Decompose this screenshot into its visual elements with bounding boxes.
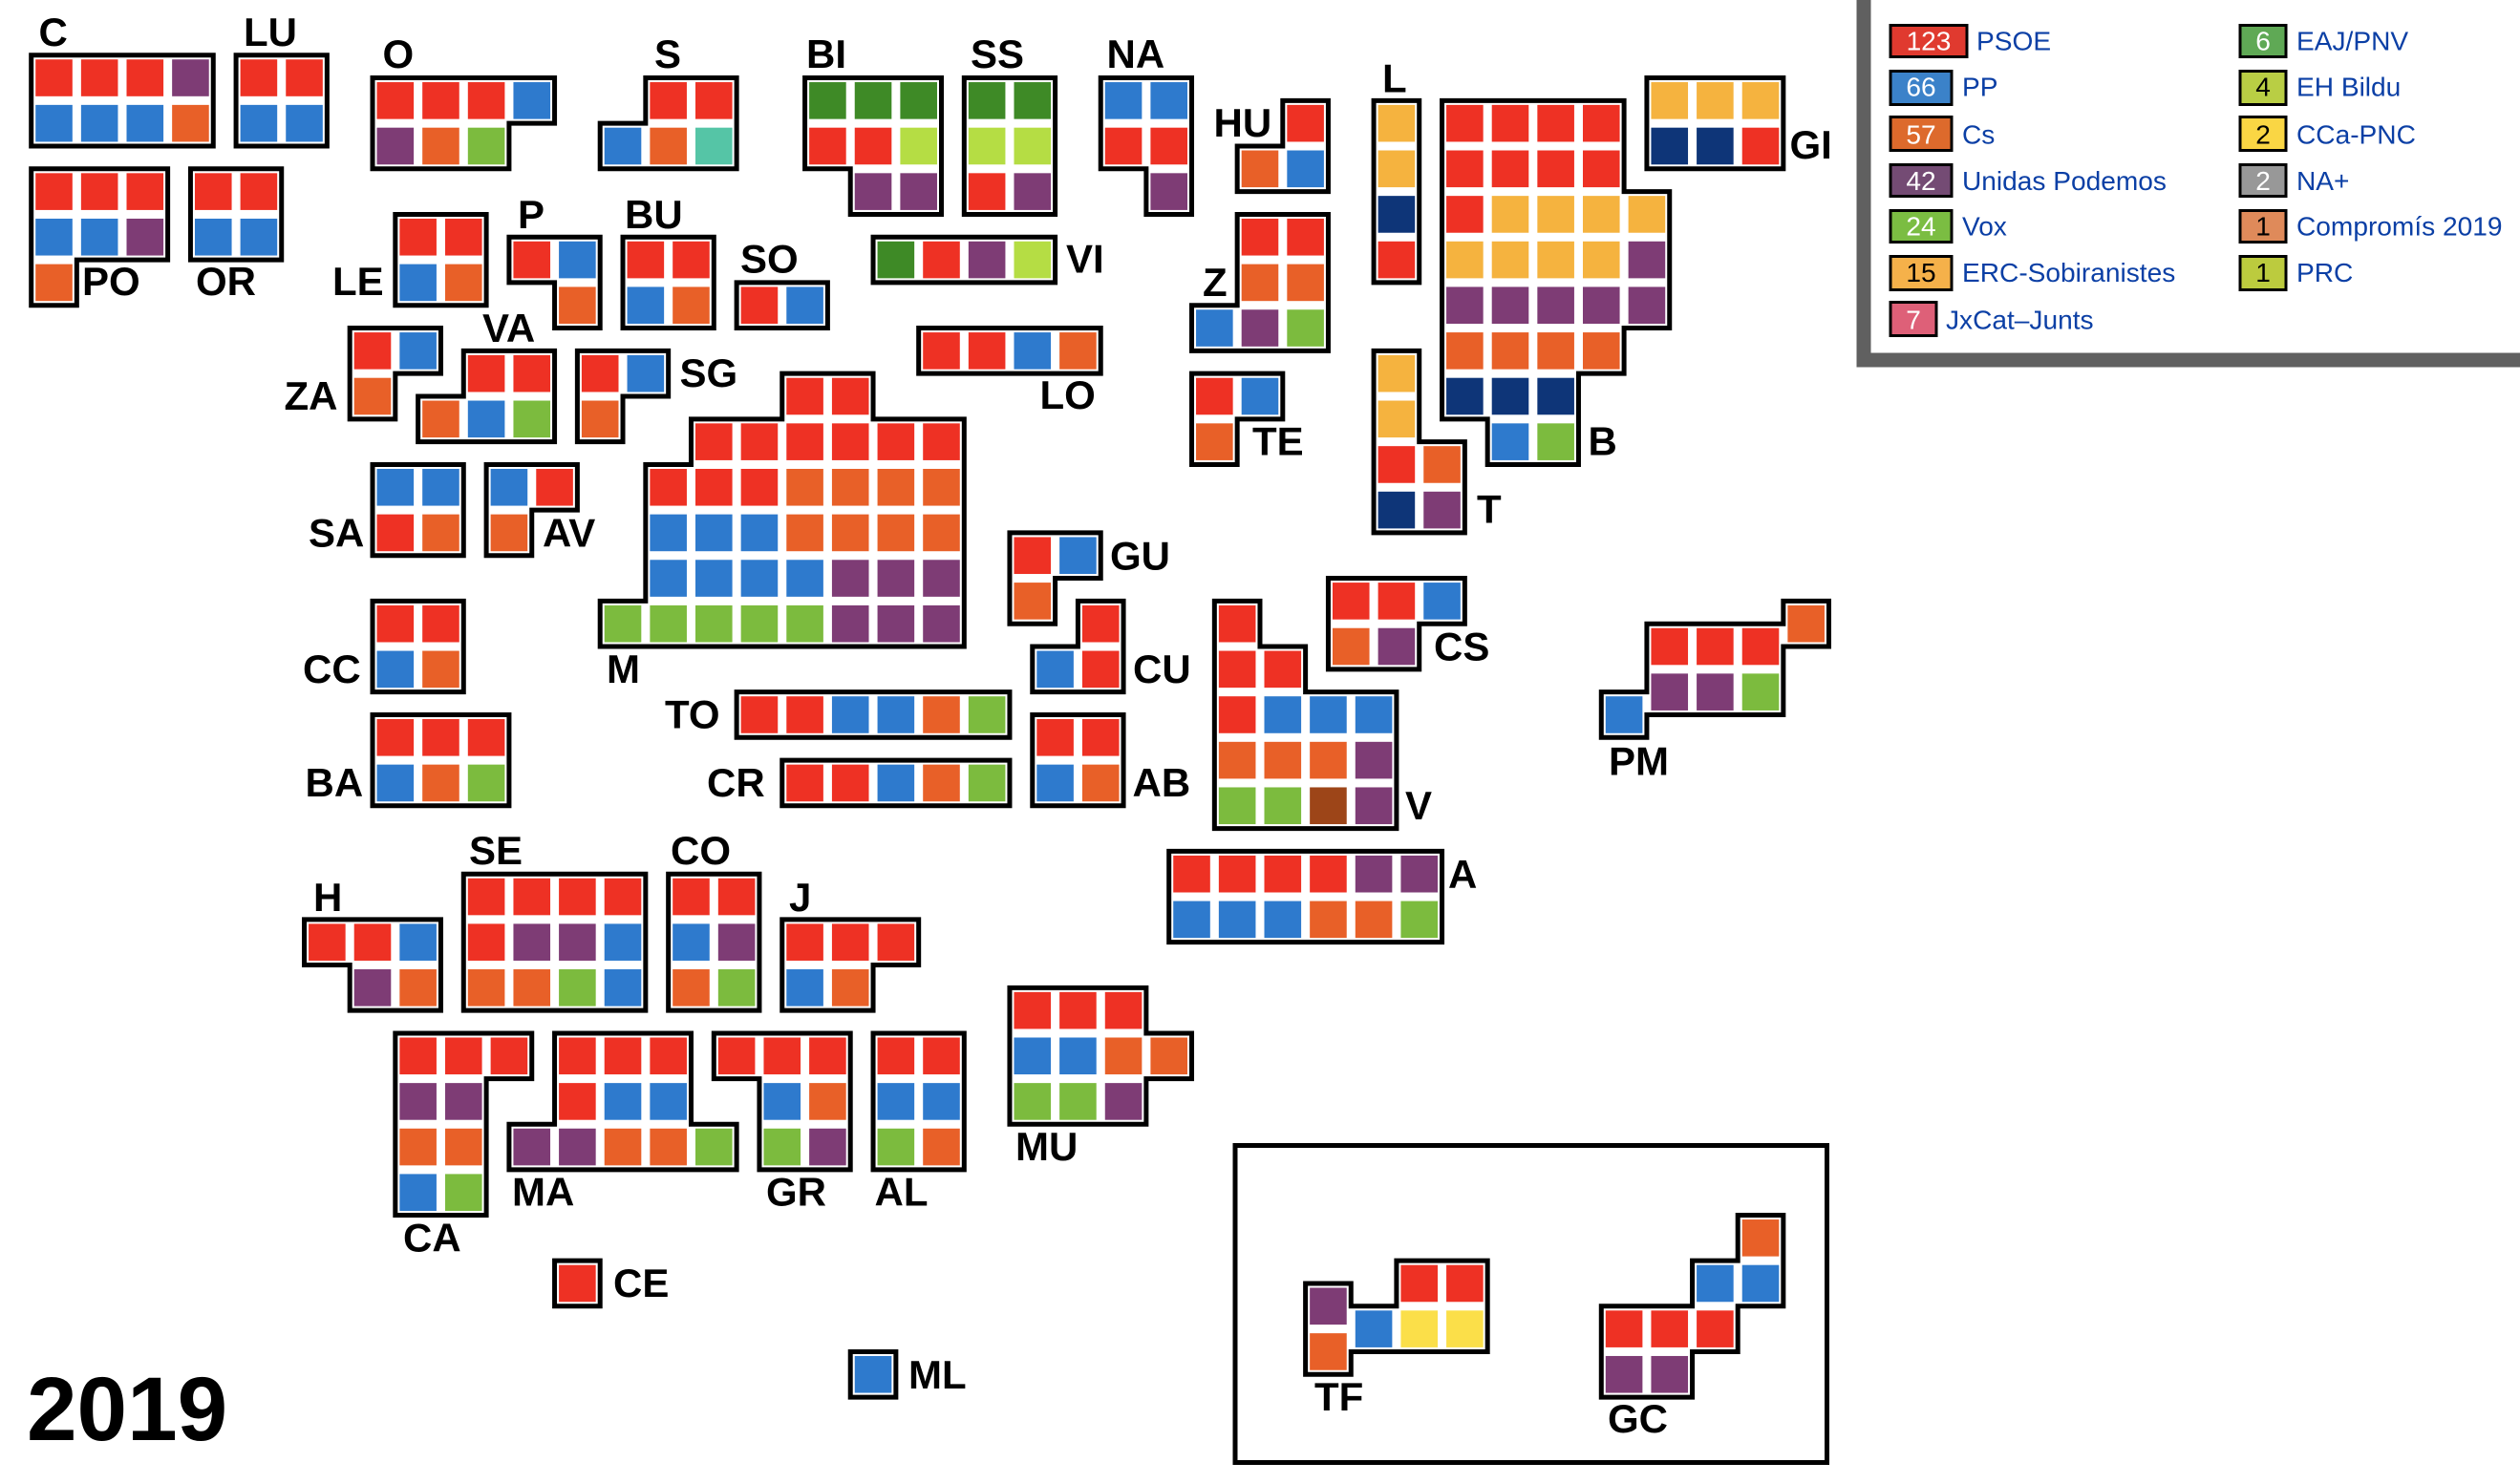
label: H: H xyxy=(313,875,342,920)
block: L xyxy=(1374,100,1420,283)
legend item: PSOE xyxy=(1890,25,2051,57)
block: LE xyxy=(395,214,486,306)
label: AB: AB xyxy=(1133,760,1190,805)
block: T xyxy=(1374,350,1464,533)
label: M: M xyxy=(607,647,640,691)
block: AL xyxy=(873,1033,964,1170)
label: SO: SO xyxy=(740,237,799,281)
block: GU xyxy=(1010,533,1100,624)
block: CO xyxy=(669,874,759,1010)
block: Z xyxy=(1192,214,1328,350)
label: B: B xyxy=(1588,418,1617,464)
block: SE xyxy=(463,874,646,1010)
block: PO xyxy=(32,169,168,306)
block: HU xyxy=(1237,100,1328,192)
legend item: EH Bildu xyxy=(2240,71,2401,105)
label: GI: GI xyxy=(1790,122,1832,167)
block: CA xyxy=(395,1033,532,1216)
legend item: PP: PP xyxy=(1962,73,1997,101)
legend item: Compromís 2019: 1 xyxy=(2255,212,2271,241)
legend item: NA+: 2 xyxy=(2255,166,2271,196)
legend item: Compromís 2019: Compromís 2019 xyxy=(2296,212,2502,241)
legend item: Vox xyxy=(1890,210,2007,243)
label: TF: TF xyxy=(1314,1374,1363,1419)
province blocks xyxy=(32,55,1828,1397)
block: CE xyxy=(555,1261,600,1306)
label: SS: SS xyxy=(971,32,1024,76)
block: TE xyxy=(1192,373,1283,464)
block: SS xyxy=(964,78,1056,214)
legend item: Vox: Vox xyxy=(1962,212,2007,241)
block: SG xyxy=(577,350,669,442)
label: CO: CO xyxy=(671,828,731,873)
legend item: Cs xyxy=(1890,117,1995,151)
label: BI: BI xyxy=(806,32,846,76)
legend item: EAJ/PNV: EAJ/PNV xyxy=(2296,27,2408,55)
block: VA xyxy=(418,350,555,442)
label: LU: LU xyxy=(244,10,297,54)
block: H xyxy=(305,920,440,1010)
legend item: JxCat-Junts xyxy=(1890,302,2094,336)
label: MU: MU xyxy=(1015,1124,1078,1169)
label: BA: BA xyxy=(306,760,363,805)
label: PM: PM xyxy=(1609,739,1669,783)
legend item: EAJ/PNV xyxy=(2240,25,2408,57)
block: GI xyxy=(1647,78,1783,169)
legend item: PSOE: PSOE xyxy=(1976,27,2051,55)
label: P: P xyxy=(518,192,545,237)
legend item: Unidas Podemos: Unidas Podemos xyxy=(1962,166,2167,196)
label: V: V xyxy=(1405,783,1432,828)
legend item: Cs: Cs xyxy=(1962,120,1995,149)
label: J: J xyxy=(789,875,811,920)
label: HU: HU xyxy=(1213,100,1271,145)
block: C xyxy=(32,55,213,146)
block: CC xyxy=(373,601,463,692)
legend item: EH Bildu: 4 xyxy=(2255,73,2271,101)
block: MU xyxy=(1010,987,1192,1124)
label: CE: CE xyxy=(613,1261,669,1305)
label: CC: CC xyxy=(303,647,361,691)
block: BU xyxy=(623,237,714,329)
block: SO xyxy=(737,283,827,329)
block: AB xyxy=(1033,714,1123,806)
block: AV xyxy=(486,464,577,556)
label: CR: CR xyxy=(707,760,765,805)
block: MA xyxy=(509,1033,737,1170)
block: BI xyxy=(805,78,942,214)
label: TO: TO xyxy=(665,691,720,737)
legend item: NA+ xyxy=(2240,164,2349,197)
legend item: PRC: PRC xyxy=(2296,258,2353,287)
label: CA: CA xyxy=(403,1215,461,1261)
block: GR xyxy=(714,1033,850,1170)
label: S: S xyxy=(654,32,681,76)
label: CS: CS xyxy=(1434,625,1489,668)
label: L: L xyxy=(1382,55,1407,101)
block: LU xyxy=(236,55,327,146)
Canary Islands inset frame xyxy=(1235,1146,1826,1463)
legend frame xyxy=(1857,0,2520,367)
block: ZA xyxy=(350,329,440,419)
legend item: PRC xyxy=(2240,256,2353,290)
legend item: Vox: 24 xyxy=(1906,212,1936,241)
label: Z: Z xyxy=(1203,260,1228,305)
legend item: Unidas Podemos: 42 xyxy=(1906,166,1936,196)
legend item: PSOE: 123 xyxy=(1907,27,1951,55)
block: TO xyxy=(737,692,1010,737)
block: CS xyxy=(1328,579,1464,669)
block: S xyxy=(600,78,737,169)
block: J xyxy=(782,920,919,1010)
legend item: Unidas Podemos xyxy=(1890,164,2167,197)
block: A xyxy=(1169,851,1442,943)
label: SA: SA xyxy=(309,510,364,556)
label: GC: GC xyxy=(1608,1396,1668,1441)
legend item: JxCat-Junts: JxCat–Junts xyxy=(1946,306,2094,334)
label: LO: LO xyxy=(1039,372,1096,417)
label: VI: VI xyxy=(1066,237,1104,281)
legend item: EAJ/PNV: 6 xyxy=(2255,27,2271,55)
label: CU: CU xyxy=(1133,647,1191,691)
legend item: Cs: 57 xyxy=(1906,120,1936,149)
block: B xyxy=(1442,100,1670,464)
block: GC xyxy=(1601,1216,1783,1397)
label: A: A xyxy=(1448,852,1477,897)
label: O: O xyxy=(382,32,414,76)
block: TF xyxy=(1306,1261,1487,1374)
legend item: JxCat-Junts: 7 xyxy=(1906,306,1921,334)
label: OR: OR xyxy=(196,259,256,304)
label: SE: SE xyxy=(469,828,523,873)
label: ZA: ZA xyxy=(285,373,338,418)
label: AL: AL xyxy=(875,1169,929,1215)
block: BA xyxy=(373,714,509,806)
legend item: PRC: 1 xyxy=(2255,258,2271,287)
year title: 2019 xyxy=(27,1359,227,1460)
block: P xyxy=(509,237,600,329)
block: NA xyxy=(1100,78,1192,214)
block: VI xyxy=(873,237,1056,283)
label: AV: AV xyxy=(543,510,595,556)
legend item: CCa-PNC: 2 xyxy=(2255,120,2271,149)
label: T: T xyxy=(1477,487,1502,531)
block: O xyxy=(373,78,555,169)
block: LO xyxy=(919,329,1100,373)
label: ML: ML xyxy=(908,1352,967,1397)
label: VA: VA xyxy=(482,306,535,350)
legend item: PP xyxy=(1890,71,1997,105)
legend panel xyxy=(1857,0,2520,367)
legend item: CCa-PNC: CCa-PNC xyxy=(2296,120,2416,149)
block: SA xyxy=(373,464,463,556)
block: M xyxy=(600,373,964,647)
legend item: NA+: NA+ xyxy=(2296,166,2349,196)
legend item: CCa-PNC xyxy=(2240,117,2416,151)
block: PM xyxy=(1601,601,1828,737)
label: GR: GR xyxy=(766,1169,826,1215)
label: BU: BU xyxy=(625,192,683,237)
label: PO: PO xyxy=(82,259,140,304)
label: TE: TE xyxy=(1252,418,1304,464)
label: NA: NA xyxy=(1106,32,1164,76)
block: CU xyxy=(1033,601,1123,692)
block: CR xyxy=(782,760,1010,806)
label: MA: MA xyxy=(512,1169,574,1215)
block: OR xyxy=(190,169,282,260)
legend item: ERC-Sobiranistes: ERC-Sobiranistes xyxy=(1962,258,2175,287)
block: ML xyxy=(850,1351,896,1397)
legend item: ERC-Sobiranistes: 15 xyxy=(1906,258,1936,287)
block: V xyxy=(1214,601,1397,829)
legend item: PP: 66 xyxy=(1906,73,1936,101)
label: LE: LE xyxy=(332,259,384,304)
legend item: ERC-Sobiranistes xyxy=(1890,256,2175,290)
label: GU: GU xyxy=(1110,533,1170,579)
legend item: EH Bildu: EH Bildu xyxy=(2296,73,2401,101)
label: C: C xyxy=(38,10,68,54)
label: SG: SG xyxy=(680,350,737,395)
province labels xyxy=(38,10,1832,1441)
